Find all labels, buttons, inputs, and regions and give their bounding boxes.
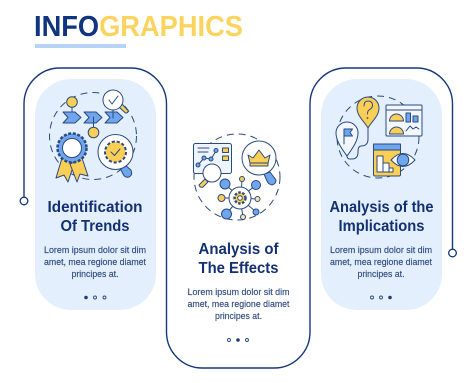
title: INFOGRAPHICS xyxy=(34,11,243,43)
panel: right card background xyxy=(321,79,442,310)
body text: right: principes at. xyxy=(358,269,404,279)
body text: left: Lorem ipsum dolor sit dim xyxy=(44,245,146,255)
body text: right: amet, mea regione diamet xyxy=(330,257,432,267)
body text: left: principes at. xyxy=(72,269,118,279)
heading: analysis of the effects: Analysis of xyxy=(198,241,279,258)
body text: middle: Lorem ipsum dolor sit dim xyxy=(188,287,290,297)
body text: left xyxy=(44,245,146,279)
icon: effects xyxy=(194,134,280,220)
heading: analysis of the implications: Implications xyxy=(338,218,424,235)
pagination dots: left xyxy=(84,296,106,299)
panel: left card background xyxy=(35,79,156,310)
heading: analysis of the implications: Analysis of the xyxy=(330,199,434,216)
body text: middle: principes at. xyxy=(215,311,262,321)
body text: middle: amet, mea regione diamet xyxy=(188,299,290,309)
heading: identification of trends xyxy=(48,199,142,235)
icon: trends xyxy=(50,90,136,182)
body text: left: amet, mea regione diamet xyxy=(44,257,146,267)
icon: implications xyxy=(336,96,422,178)
heading: analysis of the effects xyxy=(198,241,279,277)
pagination dots: middle xyxy=(228,338,248,342)
heading: identification of trends: Identification xyxy=(48,199,142,216)
pagination dots: right xyxy=(370,296,392,299)
body text: middle xyxy=(188,287,290,321)
heading: identification of trends: Of Trends xyxy=(60,218,130,235)
serpentine outline xyxy=(20,68,456,368)
body text: right: Lorem ipsum dolor sit dim xyxy=(330,245,432,255)
body text: right xyxy=(330,245,432,279)
heading: analysis of the effects: The Effects xyxy=(198,260,278,277)
heading: analysis of the implications xyxy=(330,199,434,235)
